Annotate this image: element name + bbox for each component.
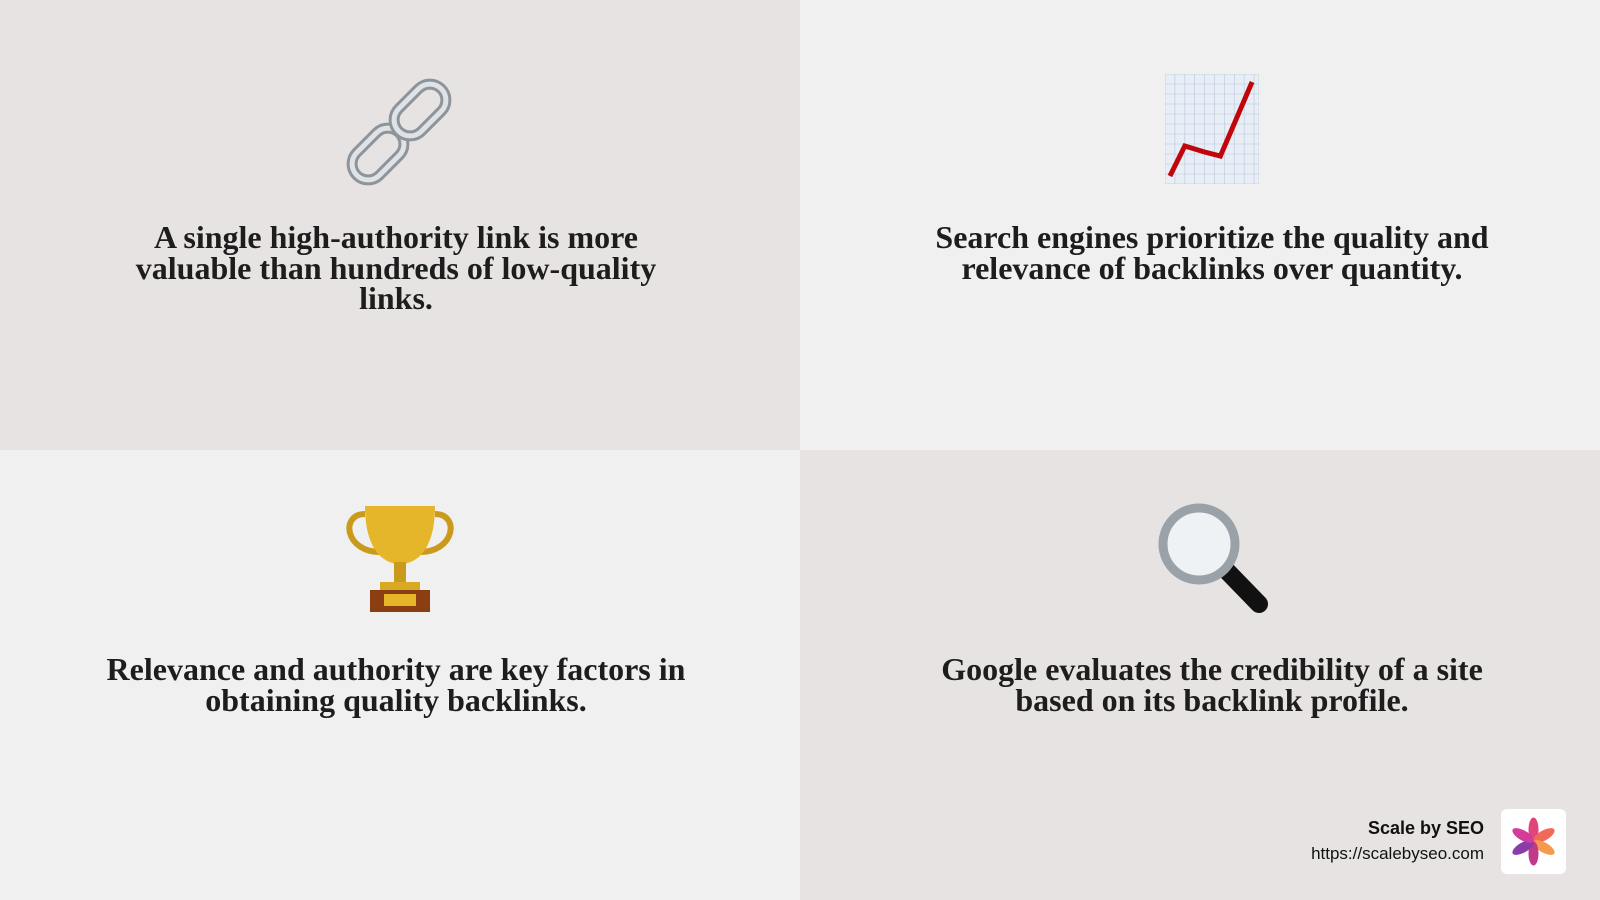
text: statement 4: Google evaluates the credibility of a site based on its backlink profile. bbox=[941, 651, 1483, 718]
brand text: https://scalebyseo.com bbox=[1311, 844, 1484, 863]
panel: bottom-right bbox=[800, 450, 1600, 900]
icon: magnifier bbox=[1158, 504, 1268, 613]
panel: top-left bbox=[0, 0, 800, 450]
icon: trophy bbox=[346, 506, 454, 612]
brand text bbox=[1311, 818, 1484, 863]
logo bbox=[1501, 809, 1566, 874]
text: statement 1: A single high-authority link is more valuable than hundreds of low-quality links. bbox=[136, 219, 656, 316]
icon: chart bbox=[1165, 74, 1259, 184]
text: statement 2: Search engines prioritize the quality and relevance of backlinks over quantity. bbox=[935, 219, 1489, 286]
panel: bottom-left bbox=[0, 450, 800, 900]
brand text: Scale by SEO bbox=[1368, 818, 1484, 838]
text: statement 3: Relevance and authority are key factors in obtaining quality backlinks. bbox=[107, 651, 685, 718]
icon: chain link bbox=[346, 78, 452, 186]
panel: top-right bbox=[800, 0, 1600, 450]
